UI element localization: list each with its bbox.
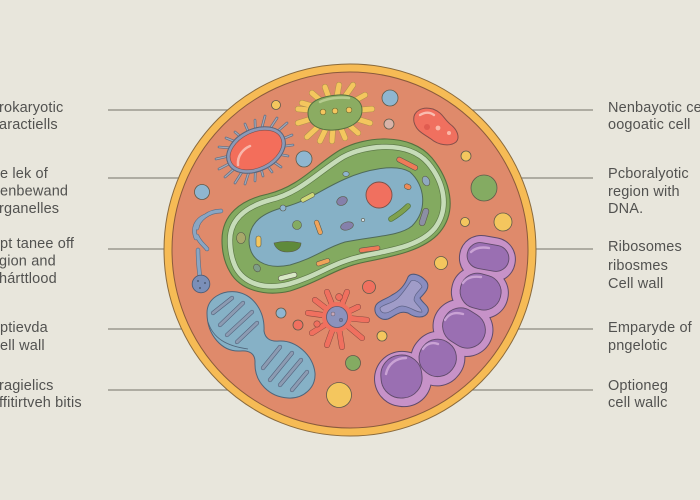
label 3: hárttlood [0, 271, 57, 287]
label 9: Emparyde of [608, 320, 693, 336]
right labels [608, 100, 700, 411]
label 1 [0, 100, 63, 133]
leader lines [108, 110, 593, 390]
organelle: spiked red bacterium [216, 116, 293, 184]
label 6: oogoatic cell [608, 117, 691, 133]
central organelle [222, 139, 450, 293]
label 2: rganelles [0, 201, 59, 217]
pale membrane [230, 147, 444, 286]
label 5 [0, 378, 82, 411]
label 7: Pcboralyotic [608, 166, 689, 182]
pale membrane outline [230, 147, 444, 286]
label 10: cell wallc [608, 395, 668, 411]
outer membrane [371, 233, 518, 410]
label 7: region with [608, 184, 680, 200]
label 6 [608, 100, 700, 133]
label 2: enbewand [0, 184, 68, 200]
lobe highlights [386, 247, 489, 374]
inner details [236, 156, 431, 281]
nucleolus [366, 182, 392, 208]
label 8: Cell wall [608, 276, 663, 292]
outer green band [222, 139, 450, 293]
small vesicles [194, 90, 512, 408]
label 1: rokaryotic [0, 100, 63, 116]
inner lobes [379, 241, 511, 400]
organelle: purple segmented chain [370, 231, 519, 412]
label 7 [608, 166, 689, 217]
label 3: gion and [0, 254, 56, 270]
label 7: DNA. [608, 201, 643, 217]
organelle: red star with nucleus [308, 292, 367, 347]
label 8 [608, 239, 682, 292]
outer membrane outline [370, 231, 519, 412]
label 10: Optioneg [608, 378, 668, 394]
organelle: red capsule [414, 108, 458, 145]
label 1: aractiells [0, 117, 58, 133]
organelle: green body with yellow rays [298, 85, 372, 141]
organelle: purple endoplasmic blob [375, 274, 428, 319]
label 8: ribosmes [608, 258, 668, 274]
label 4: ptievda [0, 320, 49, 336]
label 4: ell wall [0, 338, 45, 354]
label 9 [608, 320, 693, 354]
cell body with yellow wall [164, 64, 536, 436]
blue lumen [249, 168, 423, 266]
flagellum with basal body [192, 211, 221, 293]
label 5: ffitirtveh bitis [0, 395, 82, 411]
label 9: pngelotic [608, 338, 667, 354]
label 3: pt tanee off [0, 236, 75, 252]
left labels [0, 100, 82, 411]
label 10 [608, 378, 668, 411]
label 2 [0, 166, 68, 217]
label 3 [0, 236, 75, 287]
label 2: e lek of [0, 166, 49, 182]
mitochondrion [207, 292, 315, 398]
label 8: Ribosomes [608, 239, 682, 255]
label 4 [0, 320, 49, 354]
label 5: ragielics [0, 378, 54, 394]
